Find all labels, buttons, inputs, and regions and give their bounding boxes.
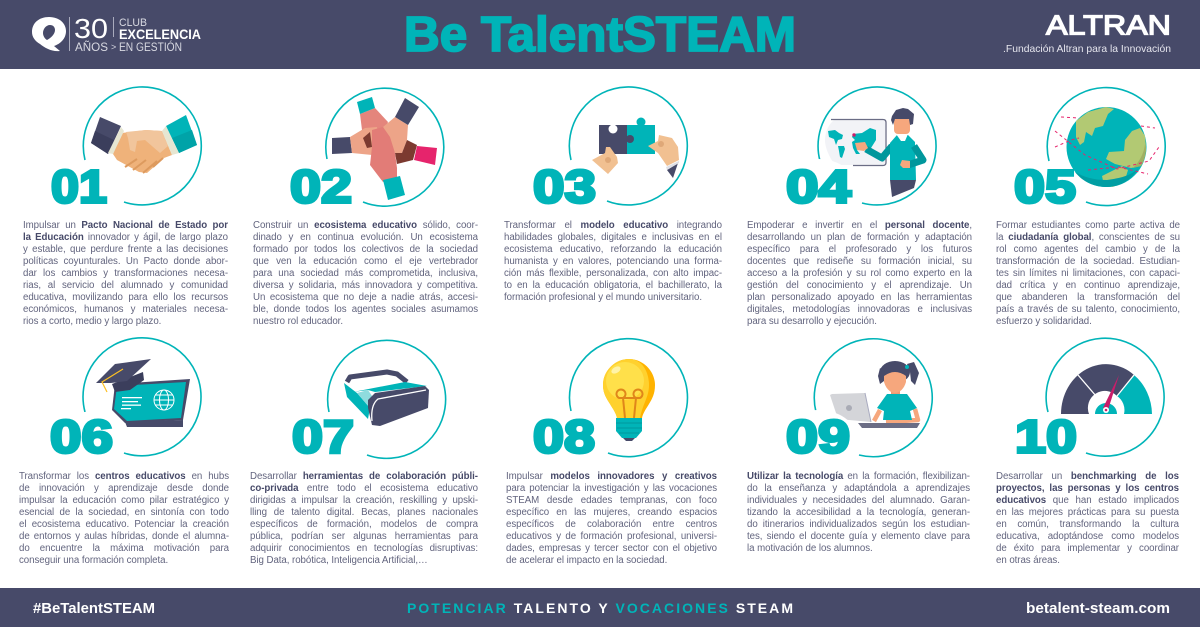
- number 02: 02: [290, 160, 352, 212]
- text block 06: esencial de la sociedad, en sintonía con todo: [19, 507, 229, 518]
- text block 06: [19, 471, 229, 566]
- text block 06: do encuentre la máxima motivación para: [19, 543, 229, 554]
- number 03: 03: [533, 160, 596, 212]
- text block 04: para su desarrollo y ejecución.: [747, 316, 877, 327]
- icon: globe: [1047, 88, 1165, 206]
- text block 03: [504, 220, 722, 303]
- text block 10: en común, transformando la cultura: [996, 519, 1179, 530]
- text block 07: Big Data, robótica, Inteligencia Artificial,…: [250, 555, 428, 566]
- icon: VR headset: [328, 340, 446, 458]
- text block 01: económicos, humanos y materiales necesa-: [23, 304, 228, 315]
- text block 07: pública, podrían ser algunas herramientas para: [250, 531, 478, 542]
- panel 05: ciudadanía global: [996, 86, 1180, 327]
- text block 09: Utilizar la tecnología en la formación, flexibilizan-: [747, 471, 970, 482]
- text block 01: dar los cambios y transformaciones necesa-: [23, 268, 228, 279]
- text block 08: educativos y de formación profesional, universi-: [506, 531, 717, 542]
- logo: Club Excelencia 30 años: CLUB: [119, 17, 147, 29]
- header bar: [0, 0, 1200, 69]
- text block 04: acceso a la profesión y su rol como experto en la: [747, 268, 972, 279]
- text block 04: [747, 220, 972, 327]
- text block 08: específico en las mujeres, creando espacios: [506, 507, 717, 518]
- number 08: 08: [533, 410, 595, 462]
- panel 04: personal docente: [747, 86, 972, 327]
- text block 04: específico para el profesorado y los futuros: [747, 244, 972, 255]
- text block 01: la Educación innovador y ágil, de largo plazo: [23, 232, 228, 243]
- number 03: [527, 160, 601, 212]
- text block 06: el ecosistema educativo. Potenciar la creación: [19, 519, 229, 530]
- logo: Club Excelencia 30 años: EN GESTIÓN: [119, 41, 182, 54]
- text block 05: país a través de su talento, conocimiento,: [996, 304, 1180, 315]
- logo: Club Excelencia 30 años: 30: [74, 13, 108, 44]
- text block 10: educativos que han estado implicados: [996, 495, 1179, 506]
- panel 10: benchmarking: [996, 337, 1179, 566]
- number 04: 04: [786, 160, 852, 212]
- text block 09: [747, 471, 970, 554]
- logo: Altran: .Fundación Altran para la Innovación: [1003, 43, 1171, 55]
- logo: Club Excelencia 30 años: [32, 13, 201, 54]
- text block 02: Construir un ecosistema educativo sólido, coor-: [253, 220, 478, 231]
- text block 01: rios a corto, medio y largo plazo.: [23, 316, 161, 327]
- text block 02: para una sociedad más comprometida, inclusiva,: [253, 268, 478, 279]
- panel 06: centros educativos: [19, 337, 229, 566]
- number 02: [283, 160, 357, 212]
- icon: girl with laptop: [814, 339, 932, 457]
- text block 06: Transformar los centros educativos en hubs: [19, 471, 229, 482]
- text block 10: educativa, adoptándose como modelos: [996, 531, 1179, 542]
- text block 02: Un ecosistema que no deje a nadie atrás, accesi-: [253, 292, 478, 303]
- icon: teacher at map board: [818, 87, 936, 205]
- text block 07: [250, 471, 478, 566]
- text block 04: gestión del conocimiento y el aprendizaje. Un: [747, 280, 972, 291]
- text block 06: impulsar la educación como pilar estratégico y: [19, 495, 229, 506]
- text block 05: rol como agentes del cambio y de la: [996, 244, 1180, 255]
- number 07: 07: [292, 410, 354, 462]
- text block 02: que ven la educación como el eje vertebrador: [253, 256, 478, 267]
- text block 02: nuestro rol educador.: [253, 316, 343, 327]
- logo: Altran: [1003, 10, 1171, 55]
- logo: Club Excelencia 30 años: EXCELENCIA: [119, 27, 201, 42]
- website: betalent-steam.com: [1026, 601, 1170, 617]
- text block 04: desarrollando un plan de formación y adaptación: [747, 232, 972, 243]
- text block 10: en otras áreas.: [996, 555, 1060, 566]
- text block 10: en las mejores prácticas para su puesta: [996, 507, 1179, 518]
- text block 09: do la enseñanza y adaptándola a aprendizajes: [747, 483, 970, 494]
- text block 07: lling de talento digital. Becas, planes nacionales: [250, 507, 478, 518]
- logo: Club Excelencia 30 años: AÑOS: [75, 41, 108, 54]
- text block 02: formado por todos los colectivos de la sociedad: [253, 244, 478, 255]
- panel 02: ecosistema educativo: [253, 87, 478, 327]
- text block 03: formación profesional y el mundo universitario.: [504, 292, 702, 303]
- text block 08: para potenciar la investigación y las vocaciones: [506, 483, 717, 494]
- text block 05: Formar estudiantes como parte activa de: [996, 220, 1180, 231]
- text block 01: Impulsar un Pacto Nacional de Estado por: [23, 220, 228, 231]
- text block 09: do itinerarios individualizados según los estudian-: [747, 519, 970, 530]
- text block 06: de entornos y aulas híbridas, donde el alumna-: [19, 531, 229, 542]
- number 05: 05: [1014, 160, 1076, 212]
- text block 08: de acelerar el impacto en la sociedad.: [506, 555, 667, 566]
- text block 10: proyectos, las personas y los centros: [996, 483, 1179, 494]
- text block 07: dirigidas a impulsar la creación, reskilling y upski-: [250, 495, 478, 506]
- text block 03: to en la educación obligatoria, el bachillerato, la: [504, 280, 722, 291]
- text block 09: tizando la accesibilidad a la tecnología, generan-: [747, 507, 970, 518]
- text block 05: dad crítica y en continuo aprendizaje,: [996, 280, 1180, 291]
- text block 04: plan personalizado apoyado en las herramientas: [747, 292, 972, 303]
- text block 01: y estable, que perdure frente a las decisiones: [23, 244, 228, 255]
- text block 02: ble, donde todos los agentes sociales asumamos: [253, 304, 478, 315]
- number 10: 10: [1015, 410, 1077, 462]
- icon: light bulb: [569, 339, 687, 457]
- slogan: POTENCIAR TALENTO Y VOCACIONES STEAM: [407, 600, 793, 616]
- text block 06: conseguir una formación completa.: [19, 555, 168, 566]
- text block 03: habilidades globales, digitales e inclusivas en el: [504, 232, 722, 243]
- text block 02: [253, 220, 478, 327]
- text block 01: educativa, movilizando para ello los recursos: [23, 292, 228, 303]
- panel 09: utilizar la tecnología: [747, 338, 970, 554]
- icon: puzzle and hands: [569, 87, 687, 205]
- panel 08: modelos innovadores: [506, 338, 717, 566]
- number 09: [780, 410, 856, 464]
- text block 09: la motivación de los alumnos.: [747, 543, 873, 554]
- text block 09: tes, siendo el docente guía y elemento clave para: [747, 531, 970, 542]
- text block 05: tes sin límites ni limitaciones, con capaci-: [996, 268, 1180, 279]
- icon: gauge: [1046, 338, 1164, 456]
- title: Be TalentSTEAM: [404, 8, 796, 62]
- logo: Club Excelencia 30 años: >: [111, 42, 116, 52]
- icon: handshake: [83, 87, 201, 205]
- text block 05: [996, 220, 1180, 327]
- text block 04: docentes que rediseñe su formación inicial, su: [747, 256, 972, 267]
- text block 07: co-privada entre todo el ecosistema educativo: [250, 483, 478, 494]
- text block 10: Desarrollar un benchmarking de los: [996, 471, 1179, 482]
- text block 05: esfuerzo y solidaridad.: [996, 316, 1092, 327]
- text block 08: específicos de colaboración entre centros: [506, 519, 717, 530]
- panel 07: colaboración público-privada: [250, 340, 478, 566]
- text block 05: la ciudadanía global, conscientes de su: [996, 232, 1180, 243]
- text block 04: digitales, metodologías innovadoras e inclusivas: [747, 304, 972, 315]
- number 01: 01: [51, 160, 107, 212]
- text block 01: políticas coyunturales. Un Pacto donde abor-: [23, 256, 228, 267]
- text block 08: dades, empresas y tercer sector con el objetivo: [506, 543, 717, 554]
- number 09: 09: [786, 410, 850, 462]
- text block 01: [23, 220, 228, 327]
- text block 10: de éxito para implementar y coordinar: [996, 543, 1179, 554]
- text block 05: que abanderen la transformación del: [996, 292, 1180, 303]
- text block 09: individuales y necesidades del alumnado. Garan-: [747, 495, 970, 506]
- text block 07: Desarrollar herramientas de colaboración públi-: [250, 471, 478, 482]
- text block 07: específicos de formación, modelos de compra: [250, 519, 478, 530]
- text block 08: STEAM desde edades tempranas, con foco: [506, 495, 717, 506]
- footer bar: [0, 588, 1200, 627]
- number 06: [46, 410, 118, 464]
- text block 10: [996, 471, 1179, 566]
- text block 02: diversa y solidaria, más innovadora y competitiva.: [253, 280, 478, 291]
- text block 01: rias, al servicio del alumnado y comunidad: [23, 280, 228, 291]
- text block 03: Transformar el modelo educativo integrando: [504, 220, 722, 231]
- icon: graduation cap and monitor: [83, 338, 201, 456]
- text block 02: dinado y en continua evolución. Un ecosistema: [253, 232, 478, 243]
- text block 08: [506, 471, 717, 566]
- text block 05: transformación de la sociedad. Estudian-: [996, 256, 1180, 267]
- panel 03: modelo educativo: [504, 86, 722, 303]
- number 06: 06: [50, 410, 113, 462]
- text block 08: Impulsar modelos innovadores y creativos: [506, 471, 717, 482]
- icon: stacked hands: [326, 88, 444, 206]
- panel 01: Pacto Nacional: [23, 86, 228, 327]
- text block 03: humanista y en valores, potenciando una forma-: [504, 256, 722, 267]
- number 04: [780, 159, 856, 215]
- text block 03: ción más flexible, personalizada, con alto impac-: [504, 268, 722, 279]
- text block 04: Empoderar e invertir en el personal docente,: [747, 220, 972, 231]
- hashtag: #BeTalentSTEAM: [33, 601, 155, 617]
- text block 07: adquirir conocimientos en tecnologías disruptivas:: [250, 543, 478, 554]
- text block 03: ecosistema educativo, reforzando la educación: [504, 244, 722, 255]
- text block 06: de innovación y aprendizaje desde donde: [19, 483, 229, 494]
- logo: Altran: ALTRAN: [1046, 10, 1171, 40]
